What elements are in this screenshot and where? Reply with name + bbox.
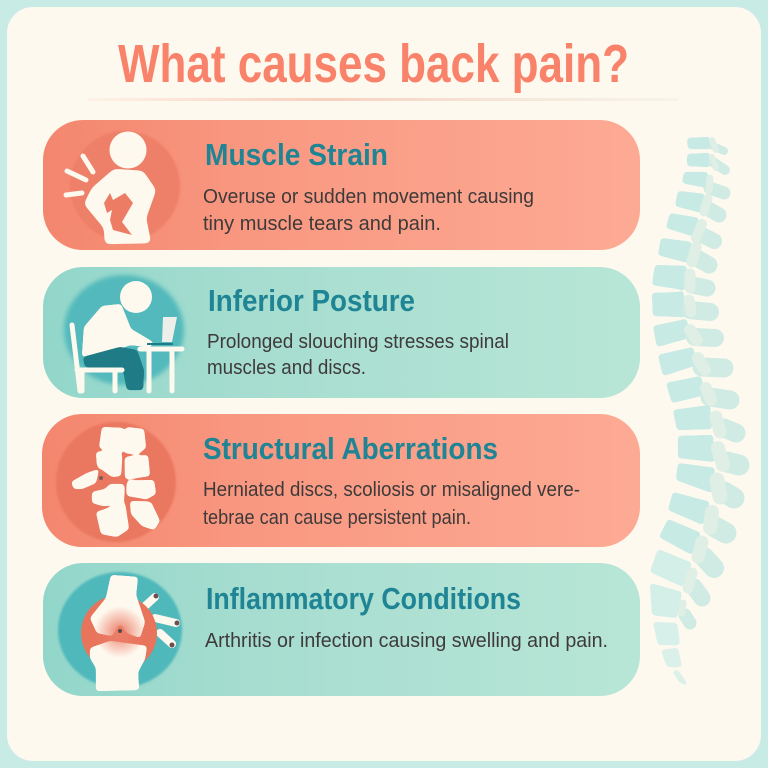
description: Prolonged slouching stresses spinal [207,330,509,353]
icon: person holding back [66,131,180,244]
description: tebrae can cause persistent pain. [203,506,471,529]
icon: misaligned vertebrae [56,422,176,542]
panel: inferior posture [43,267,640,398]
card background [43,563,640,696]
spine: vertebral bodies [650,137,715,686]
title underline [88,98,678,101]
card background [42,414,640,547]
card background [43,120,640,250]
description: tiny muscle tears and pain. [203,212,441,235]
description: Overuse or sudden movement causing [203,185,534,208]
heading: Inferior Posture [208,283,415,318]
card background [43,267,640,398]
description: Arthritis or infection causing swelling and pain. [205,629,608,652]
description: Herniated discs, scoliosis or misaligned vere- [203,478,580,501]
heading: Muscle Strain [205,137,388,172]
heading: Inflammatory Conditions [206,581,521,616]
icon: slouching person at desk [64,275,184,391]
icon: inflamed knee joint [58,572,182,691]
spine illustration [650,137,739,686]
description: muscles and discs. [207,356,366,379]
panel: inflammatory conditions [43,563,640,696]
title: What causes back pain? [118,34,629,94]
heading: Structural Aberrations [203,431,498,466]
spine: rear processes [685,146,739,623]
panel: muscle strain [43,120,640,250]
spine: discs [682,140,723,613]
panel: structural aberrations [42,414,640,547]
